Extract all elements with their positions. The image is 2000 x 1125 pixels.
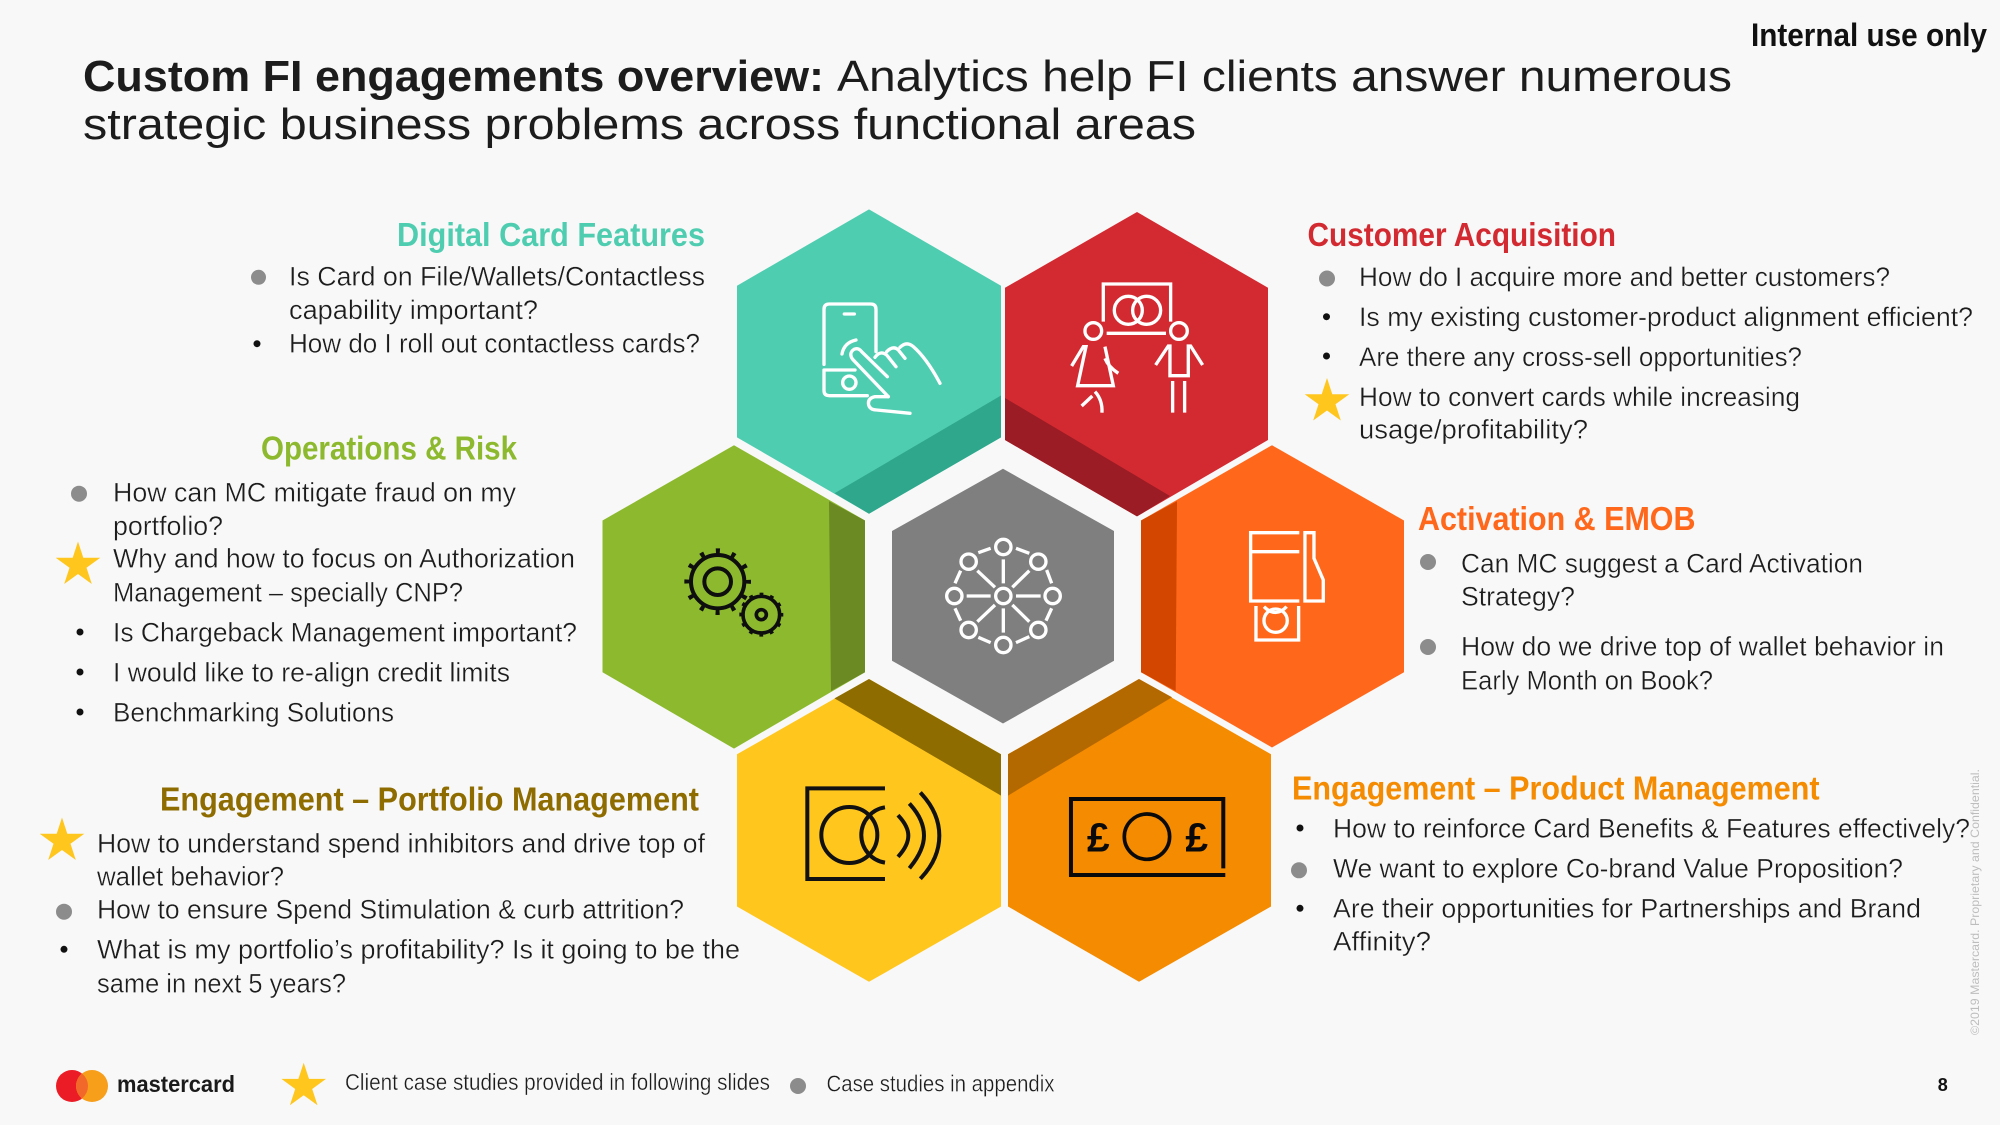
- panel: activation and EMOB hexagon: [1141, 445, 1404, 748]
- heading: digital card features: Digital Card Features: [397, 216, 705, 253]
- text block: product management: Affinity?: [1333, 926, 1431, 956]
- text block: operations and risk: I would like to re-align credit limits: [113, 658, 510, 688]
- panel: product management hexagon: [1008, 679, 1271, 982]
- text block: portfolio management: How to understand spend inhibitors and drive top of: [97, 829, 705, 859]
- text block: operations and risk: Benchmarking Solutions: [113, 698, 394, 728]
- text block: product management: Are their opportunities for Partnerships and Brand: [1333, 893, 1921, 923]
- text block: customer acquisition: [1305, 216, 1973, 445]
- text block: operations and risk: Is Chargeback Management important?: [113, 618, 577, 648]
- text block: portfolio management: [40, 781, 740, 998]
- page number: 8: [1938, 1075, 1948, 1095]
- icon: contactless card: [807, 788, 939, 879]
- text block: activation and EMOB: Strategy?: [1461, 581, 1575, 611]
- text block: product management: We want to explore Co-brand Value Proposition?: [1333, 853, 1903, 883]
- legend: star and dot meaning: [281, 1063, 1055, 1105]
- text block: customer acquisition: usage/profitability?: [1359, 415, 1588, 445]
- text block: operations and risk: How can MC mitigate fraud on my: [113, 478, 516, 508]
- legend: star and dot meaning: Case studies in appendix: [826, 1071, 1055, 1097]
- text block: portfolio management: same in next 5 years?: [97, 968, 346, 998]
- icon: gears: [688, 552, 781, 635]
- text block: activation and EMOB: How do we drive top of wallet behavior in: [1461, 631, 1944, 661]
- icon: card entering reader: [1251, 533, 1323, 640]
- text block: customer acquisition: Are there any cross-sell opportunities?: [1359, 342, 1802, 372]
- text block: product management: [1291, 769, 1970, 956]
- text block: digital card features: How do I roll out contactless cards?: [289, 329, 700, 359]
- icon: banknote with pound signs: £: [1185, 815, 1208, 861]
- heading: operations and risk: Operations & Risk: [261, 430, 518, 466]
- panel: customer acquisition hexagon: [1005, 212, 1268, 516]
- text block: portfolio management: wallet behavior?: [96, 862, 284, 892]
- text block: portfolio management: What is my portfolio’s profitability? Is it going to be the: [97, 935, 740, 965]
- text block: activation and EMOB: [1418, 500, 1944, 695]
- text block: customer acquisition: Is my existing customer-product alignment efficient?: [1359, 302, 1973, 332]
- text block: digital card features: [251, 216, 705, 359]
- text block: digital card features: Is Card on File/Wallets/Contactless: [289, 262, 705, 292]
- label: internal use only: Internal use only: [1751, 17, 1987, 53]
- heading: portfolio management: Engagement – Portfolio Management: [160, 781, 699, 818]
- text block: digital card features: capability important?: [289, 295, 538, 325]
- text block: customer acquisition: How do I acquire more and better customers?: [1359, 262, 1890, 292]
- text block: operations and risk: Management – specially CNP?: [113, 578, 463, 608]
- title: strategic business problems across functional areas: [83, 100, 1196, 149]
- text block: portfolio management: How to ensure Spend Stimulation & curb attrition?: [97, 895, 684, 925]
- panel: central analytics hexagon: [892, 469, 1114, 724]
- heading: product management: Engagement – Product Management: [1292, 769, 1820, 806]
- text block: operations and risk: Why and how to focus on Authorization: [113, 544, 575, 574]
- text block: operations and risk: [56, 430, 577, 728]
- icon: banknote with pound signs: [1071, 799, 1225, 875]
- legend: star and dot meaning: Client case studies provided in following slides: [345, 1069, 770, 1095]
- panel: operations and risk hexagon: [602, 445, 865, 749]
- icon: network wheel: [947, 539, 1060, 653]
- title: Analytics help FI clients answer numerous: [837, 52, 1732, 101]
- heading: activation and EMOB: Activation & EMOB: [1418, 500, 1696, 537]
- text block: activation and EMOB: Can MC suggest a Card Activation: [1461, 549, 1863, 579]
- copyright note: ©2019 Mastercard. Proprietary and Confidential.: [1968, 769, 1982, 1035]
- logo: mastercard: [56, 1070, 235, 1102]
- panel: portfolio management hexagon: [737, 679, 1001, 982]
- icon: banknote with pound signs: £: [1087, 815, 1110, 861]
- text block: customer acquisition: How to convert cards while increasing: [1359, 382, 1800, 412]
- heading: customer acquisition: Customer Acquisition: [1308, 216, 1616, 253]
- text block: activation and EMOB: Early Month on Book?: [1461, 665, 1713, 695]
- logo: mastercard: mastercard: [117, 1071, 235, 1097]
- icon: two people holding a card: [1072, 284, 1203, 413]
- text block: operations and risk: portfolio?: [113, 511, 223, 541]
- title: [83, 52, 1732, 149]
- text block: product management: How to reinforce Card Benefits & Features effectively?: [1333, 813, 1970, 843]
- icon: phone with tapping hand: [824, 304, 940, 413]
- panel: digital card features hexagon: [737, 209, 1001, 514]
- title: Custom FI engagements overview:: [83, 52, 824, 101]
